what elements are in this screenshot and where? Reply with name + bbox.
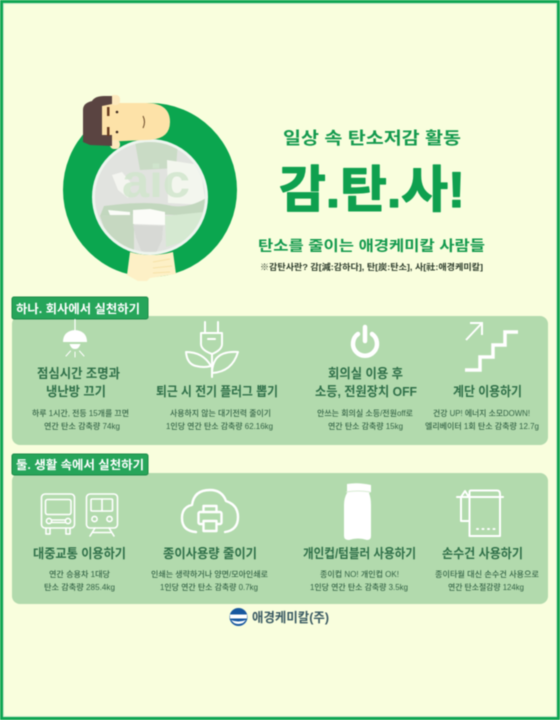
icon: train: [86, 494, 118, 536]
item: unplug: 1인당 연간 탄소 감축량 62.16kg: [166, 421, 273, 431]
hands: [127, 252, 176, 281]
item: towel: 손수건 사용하기: [442, 546, 523, 561]
globe logo letters: aic: [122, 155, 190, 207]
item: unplug: [156, 384, 278, 431]
item: unplug: 사용하지 않는 대기전력 줄이기: [170, 408, 271, 418]
item: tumbler: 개인컵/텀블러 사용하기: [303, 546, 416, 561]
item: paper: 종이사용량 줄이기: [163, 546, 257, 561]
globe: [92, 140, 208, 255]
icon: stairs: [465, 323, 518, 370]
item: towel: 종이타월 대신 손수건 사용으로: [435, 569, 539, 579]
panel: in daily life: [12, 454, 548, 604]
tab heading: [12, 454, 148, 475]
tab heading: 하나. 회사에서 실천하기: [16, 301, 140, 316]
icon: plug plant: [186, 322, 238, 377]
panel: at the office: [12, 297, 548, 445]
green ring: [63, 103, 237, 277]
item: public transit: [33, 546, 126, 592]
icon: cloud printer: [182, 490, 238, 532]
item: tumbler: [303, 546, 416, 592]
eyes and brows: [107, 107, 118, 136]
item: stairs: 엘리베이터 1회 탄소 감축량 12.7g: [425, 421, 539, 431]
item: towel: 연간 탄소절감량 124kg: [448, 582, 524, 592]
heading: tagline: 탄소를 줄이는 애경케미칼 사람들: [258, 238, 485, 255]
item: meeting room: 회의실 이용 후: [328, 366, 403, 381]
heading: subtitle line: 일상 속 탄소저감 활동: [283, 129, 461, 148]
item: meeting room: 연간 탄소 감축량 15kg: [328, 421, 403, 431]
item: paper: 인쇄는 생략하거나 양면/모아인쇄로: [151, 569, 268, 579]
item: public transit: 탄소 감축량 285.4kg: [44, 582, 115, 592]
item: towel: [435, 546, 539, 592]
mouth: [143, 116, 144, 128]
icon: towel: [457, 490, 503, 536]
face: [102, 103, 170, 142]
note: definition: ※감탄사란? 감[減:감하다], 탄[炭:탄소], 사[社:애경케미칼]: [260, 262, 483, 272]
heading: main title: 감.탄.사!: [279, 162, 465, 218]
item: public transit: 대중교통 이용하기: [33, 546, 126, 561]
item: lights off: 하루 1시간, 전등 15개를 끄면: [32, 408, 129, 418]
icon: company mark: [230, 608, 248, 626]
item: stairs: [425, 384, 539, 431]
hair: [83, 96, 112, 146]
illustration: person hugging globe: [63, 95, 237, 281]
item: lights off: 냉난방 끄기: [46, 384, 106, 399]
footer logo: [230, 608, 329, 626]
icon: ceiling lamp: [63, 319, 87, 357]
item: lights off: 연간 탄소 감축량 74kg: [44, 421, 120, 431]
item: stairs: 건강 UP! 에너지 소모DOWN!: [433, 408, 530, 418]
item: meeting room: [315, 366, 417, 431]
icon: bus: [42, 494, 74, 534]
ears: [110, 95, 120, 149]
icon: tumbler: [344, 483, 371, 540]
item: tumbler: 1인당 연간 탄소 감축량 3.5kg: [310, 582, 408, 592]
item: paper: [151, 546, 268, 592]
item: lights off: [32, 366, 129, 431]
footer logo: 애경케미칼(주): [252, 610, 329, 625]
item: meeting room: 소등, 전원장치 OFF: [315, 384, 417, 399]
item: tumbler: 종이컵 NO! 개인컵 OK!: [320, 569, 399, 579]
item: unplug: 퇴근 시 전기 플러그 뽑기: [156, 384, 278, 399]
icon: power button: [353, 327, 377, 356]
tab heading: [12, 297, 148, 319]
item: lights off: 점심시간 조명과: [37, 366, 120, 381]
item: stairs: 계단 이용하기: [453, 384, 522, 399]
tab heading: 둘. 생활 속에서 실천하기: [16, 457, 144, 472]
item: meeting room: 안쓰는 회의실 소등/전원off로: [317, 408, 413, 418]
item: paper: 1인당 연간 탄소 감축량 0.7kg: [160, 582, 258, 592]
item: public transit: 연간 승용차 1대당: [49, 569, 111, 579]
